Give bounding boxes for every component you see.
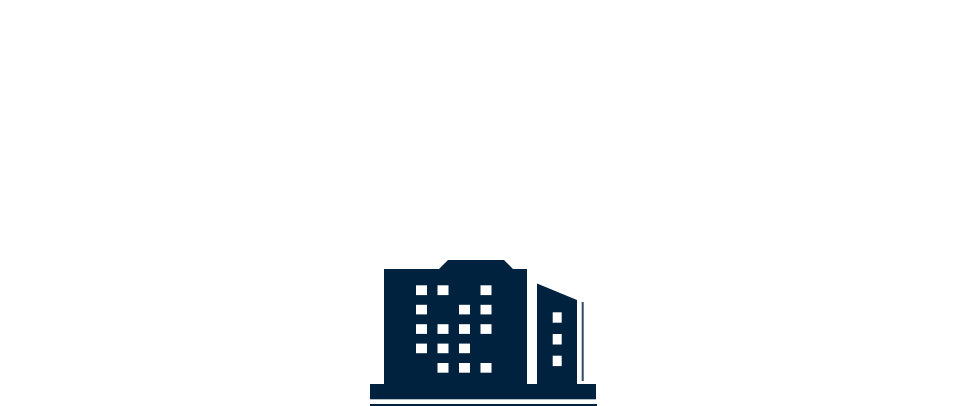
side building windows xyxy=(553,312,562,366)
ground base xyxy=(370,384,596,399)
ground line xyxy=(370,404,597,406)
side building xyxy=(537,284,577,385)
main building xyxy=(384,260,527,385)
side strip xyxy=(582,302,584,381)
main building windows xyxy=(416,285,492,373)
